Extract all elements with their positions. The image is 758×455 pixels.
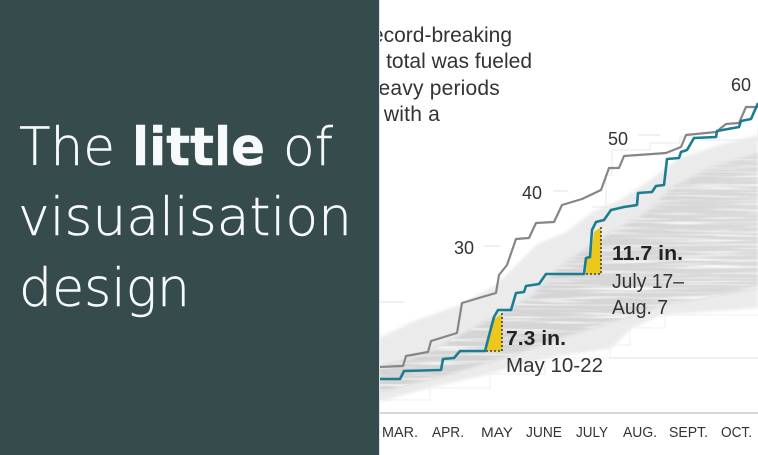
annotation: May: 7.3 in.	[506, 328, 566, 350]
chart: cumulative rainfall	[379, 75, 758, 441]
axis values: 30	[454, 238, 474, 258]
annotation: July	[612, 243, 685, 319]
title	[18, 117, 352, 319]
outlying year lines	[379, 128, 758, 400]
month labels: AUG.	[623, 425, 657, 441]
line: record year grey	[379, 107, 758, 367]
month labels	[382, 424, 752, 441]
streak texture of year lines	[380, 159, 758, 391]
highlighted period: May 10-22	[486, 313, 502, 351]
month labels: OCT.	[721, 425, 752, 441]
cropped chart description	[323, 24, 532, 126]
month labels: SEPT.	[669, 425, 708, 441]
line: highlighted year teal	[379, 103, 758, 379]
cropped chart description: by heavy periods	[338, 77, 500, 100]
annotation: May: May 10-22	[506, 355, 603, 377]
cropped chart description: along with a	[326, 103, 440, 126]
month labels: MAY	[481, 424, 514, 440]
axis values: 60	[731, 75, 751, 95]
title: The	[19, 117, 115, 178]
month labels: JULY	[576, 425, 608, 441]
x axis line	[379, 412, 758, 414]
month labels: MAR.	[382, 425, 418, 441]
title: visualisation	[18, 187, 352, 248]
gridline ticks	[379, 135, 758, 358]
panel edge	[379, 0, 380, 455]
cropped chart description: The record-breaking	[323, 24, 512, 47]
title: of	[283, 117, 333, 178]
annotation: July: Aug. 7	[612, 297, 668, 319]
outer band of historical years	[379, 135, 758, 402]
panel: title background	[0, 0, 379, 455]
annotation: May	[506, 328, 603, 377]
cropped chart description: rain total was fueled	[345, 50, 532, 73]
annotation: July: July 17–	[612, 271, 685, 293]
month labels: APR.	[432, 425, 464, 441]
axis values: 50	[608, 129, 628, 149]
annotation: July: 11.7 in.	[612, 243, 683, 265]
axis values	[454, 75, 751, 258]
title: design	[19, 258, 190, 319]
highlighted period: July 17-Aug. 7	[586, 226, 601, 274]
title: little	[132, 117, 265, 178]
dense core of historical years	[379, 153, 758, 392]
axis values: 40	[522, 183, 542, 203]
month labels: JUNE	[526, 425, 562, 441]
